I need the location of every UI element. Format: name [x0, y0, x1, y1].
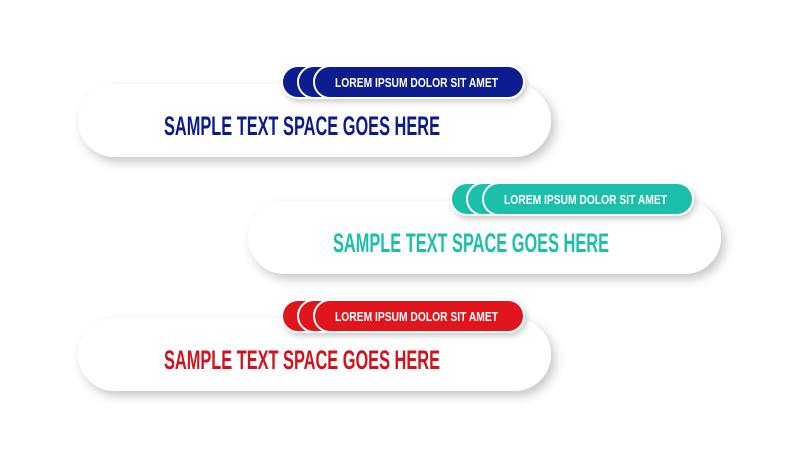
tag: blue pill	[282, 66, 524, 98]
tag: teal pill	[451, 183, 693, 215]
heading: red text: SAMPLE TEXT SPACE GOES HERE	[164, 345, 440, 375]
heading: blue text: SAMPLE TEXT SPACE GOES HERE	[164, 111, 440, 141]
tag: red pill: LOREM IPSUM DOLOR SIT AMET	[335, 309, 498, 324]
heading: teal text: SAMPLE TEXT SPACE GOES HERE	[333, 228, 609, 258]
tag: red pill	[282, 300, 524, 332]
panel: lower third red	[78, 300, 551, 391]
tag: teal pill: LOREM IPSUM DOLOR SIT AMET	[504, 192, 667, 207]
tag: blue pill: LOREM IPSUM DOLOR SIT AMET	[335, 75, 498, 90]
panel: lower third blue	[78, 66, 551, 157]
panel: lower third teal	[248, 183, 721, 274]
